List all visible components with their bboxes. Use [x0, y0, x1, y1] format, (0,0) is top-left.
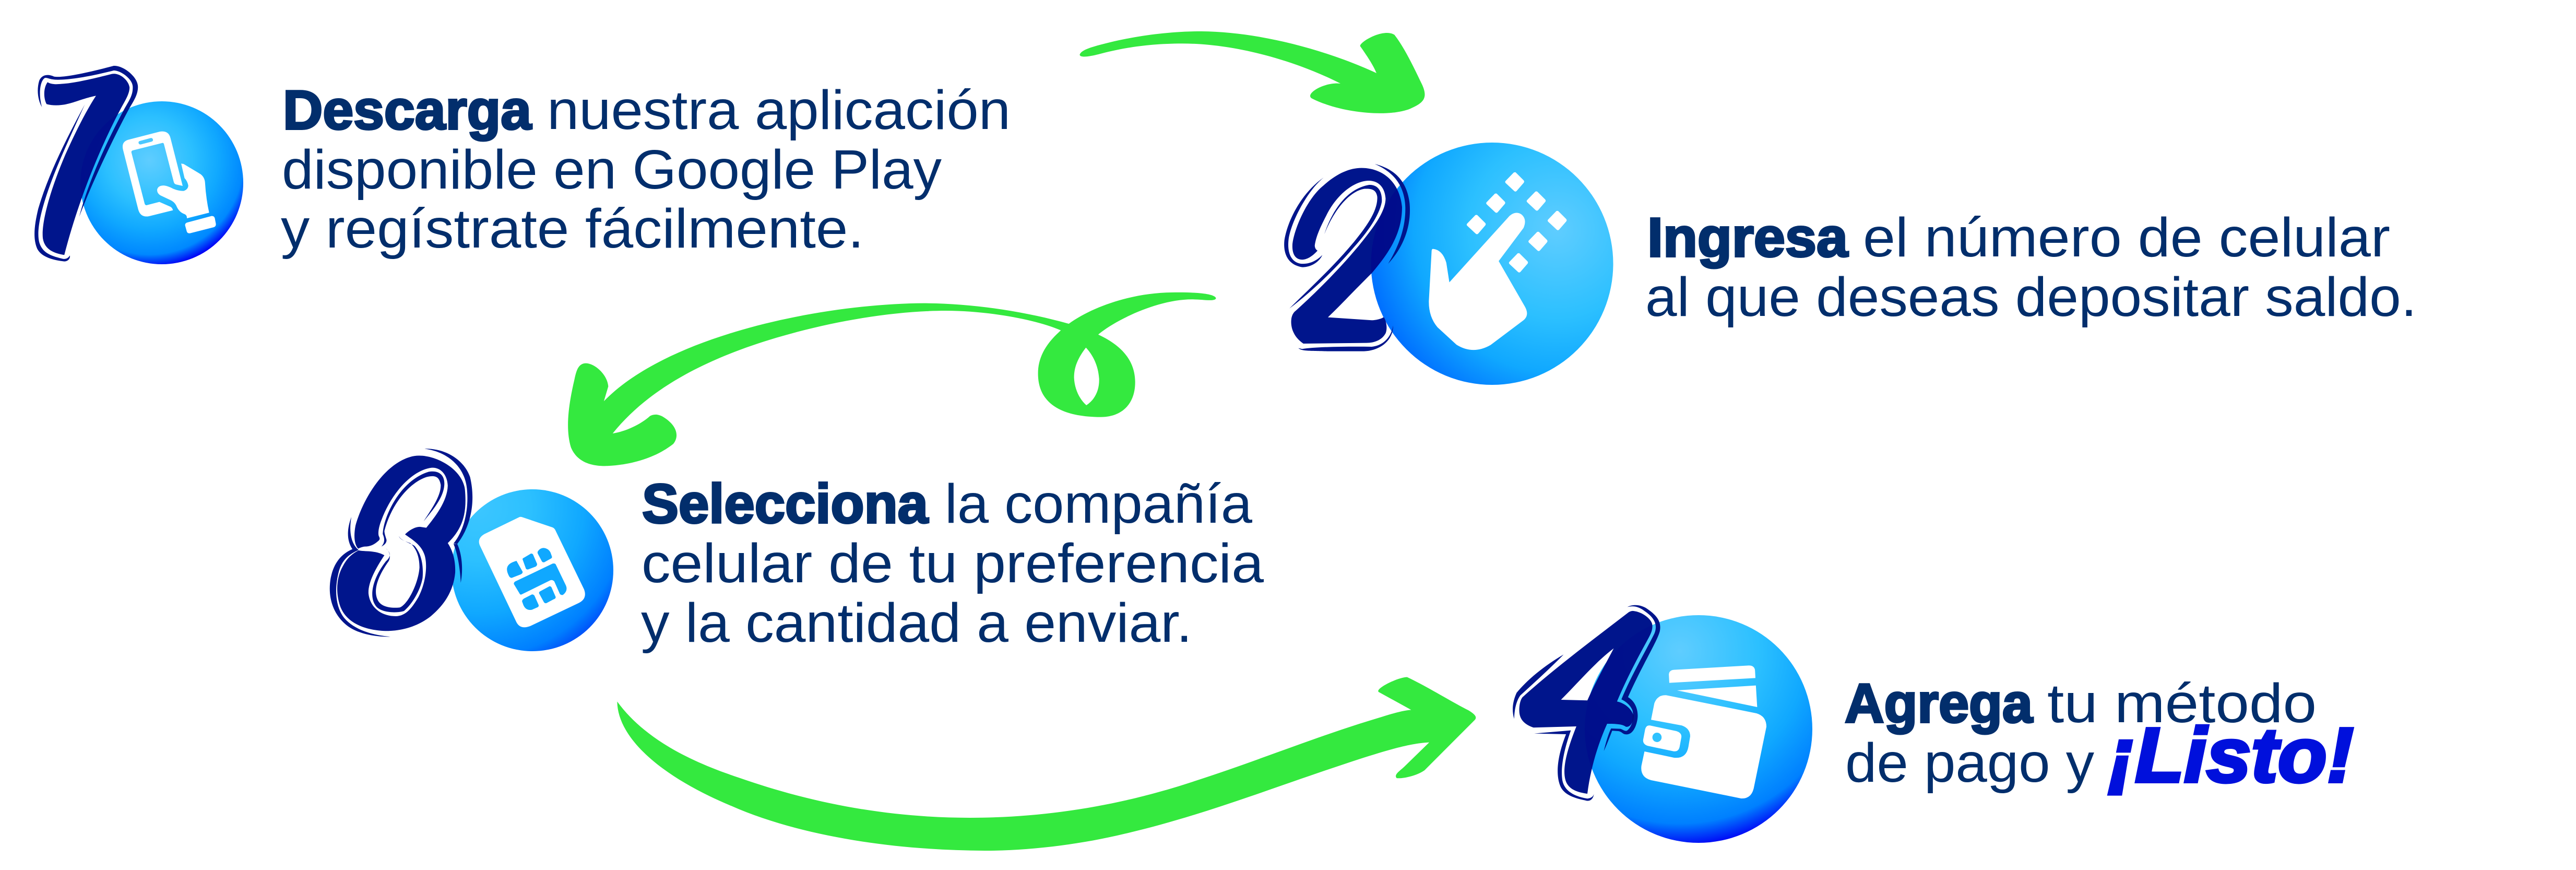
callout: Listo: ¡Listo! — [2108, 712, 2354, 798]
text: step 1: nuestra aplicación — [547, 79, 1011, 141]
text: step 2: al que deseas depositar saldo. — [1645, 266, 2417, 328]
arrow: step 3 to step 4 — [617, 677, 1476, 851]
step 3 badge — [330, 449, 613, 651]
text: step 4: tu método — [2047, 673, 2317, 734]
icon: hand holding phone — [123, 132, 216, 233]
step 1 badge — [34, 66, 243, 264]
step 4 circle — [1585, 615, 1812, 843]
text: step 1: Descarga — [283, 79, 532, 141]
text: step 3: Selecciona — [642, 473, 929, 535]
icon: wallet with cards — [1641, 665, 1766, 798]
text: step 2 — [1645, 207, 2417, 328]
text: step 4: Agrega — [1845, 673, 2033, 734]
arrow: step 2 to step 3 with loop — [568, 292, 1216, 466]
number 3 — [330, 449, 472, 637]
text: step 3: la compañía — [945, 473, 1252, 535]
text: step 1: y regístrate fácilmente. — [281, 198, 864, 260]
step 1 circle — [80, 101, 243, 264]
text: step 3: celular de tu preferencia — [642, 533, 1264, 594]
text: step 4: de pago y — [1845, 732, 2094, 794]
text: step 1: disponible en Google Play — [282, 139, 942, 201]
number 4 — [1513, 605, 1660, 801]
text: step 3: y la cantidad a enviar. — [641, 592, 1192, 654]
text: step 4 — [1845, 673, 2354, 798]
step 3 circle — [452, 489, 613, 651]
text: step 2: Ingresa — [1647, 207, 1848, 268]
icon: SIM card — [479, 517, 585, 627]
text: step 1 — [281, 79, 1011, 260]
number 1 — [34, 66, 138, 262]
arrow: step 1 to step 2 — [1079, 31, 1425, 113]
text: step 2: el número de celular — [1863, 207, 2390, 268]
text: step 3 — [641, 473, 1264, 654]
step 2 badge — [1284, 143, 1613, 385]
step 4 badge — [1513, 605, 1812, 843]
icon: finger tapping keypad — [1429, 172, 1566, 350]
number 2 — [1284, 164, 1410, 351]
step 2 circle — [1371, 143, 1613, 385]
